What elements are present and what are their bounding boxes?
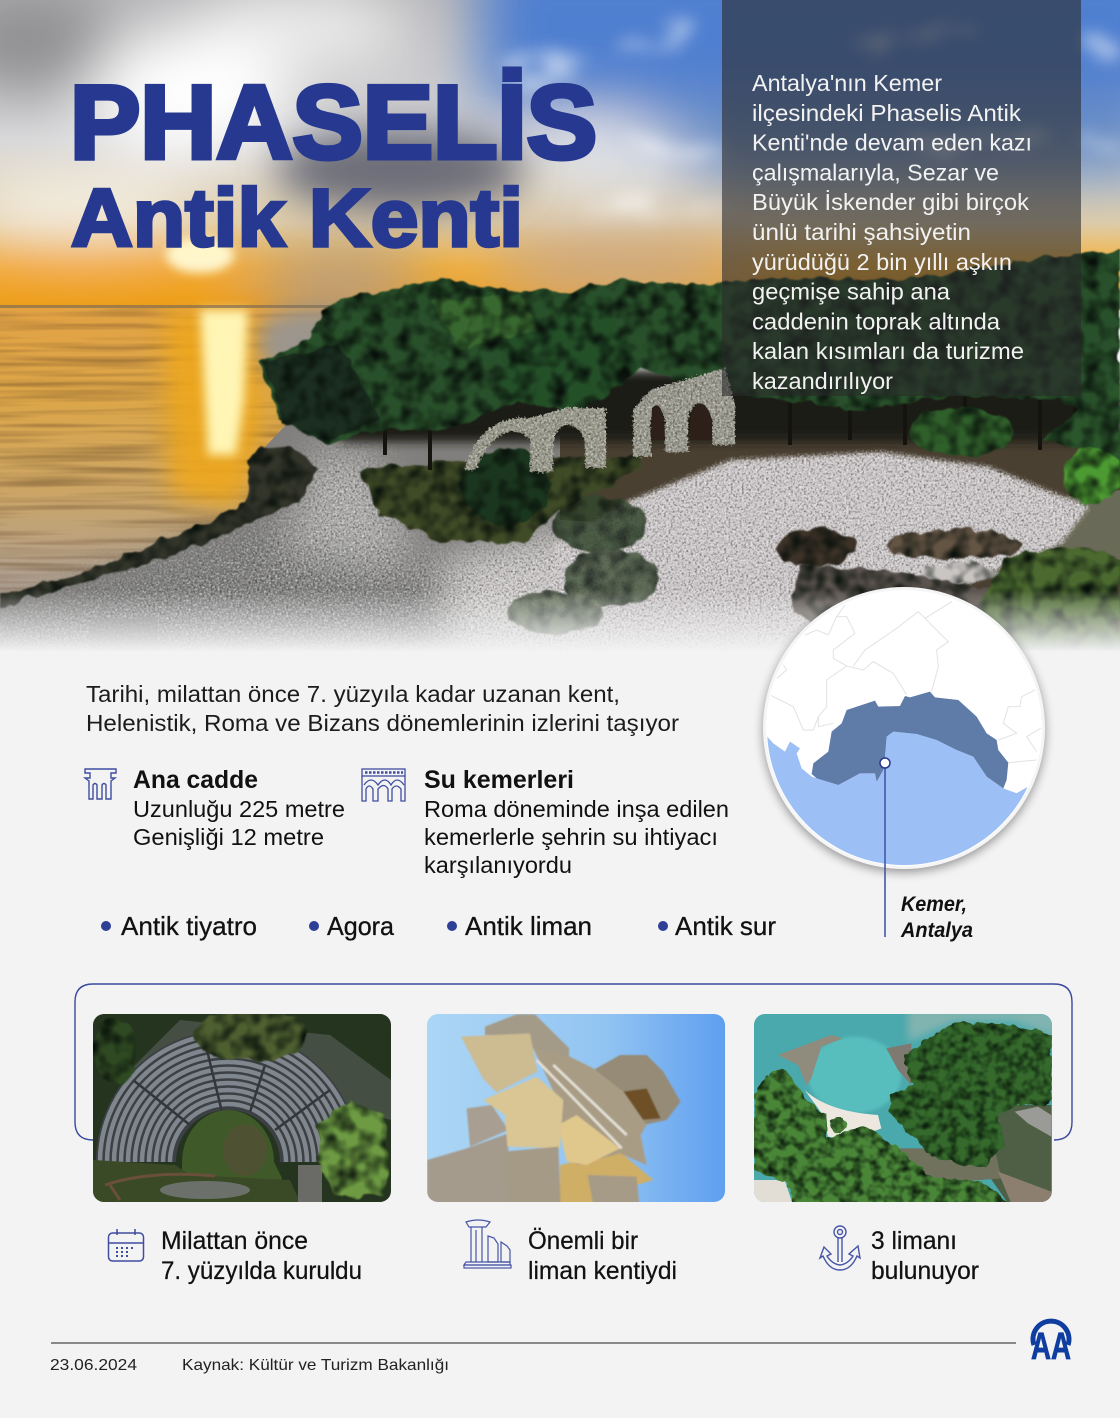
text: Ana cadde: Ana cadde xyxy=(133,766,258,794)
rocks around seating xyxy=(130,1020,391,1120)
shaded forest floor xyxy=(340,370,1120,442)
bottom left sand xyxy=(754,1180,793,1205)
intro paragraph: kalan kısımları da turizme xyxy=(752,338,1024,364)
intro paragraph: Antalya'nın Kemer xyxy=(752,70,942,96)
bullet list of sites: Agora xyxy=(327,911,395,941)
subtitle text: Tarihi, milattan önce 7. yüzyıla kadar uzanan kent, xyxy=(86,681,620,707)
cornice stripes xyxy=(537,1060,627,1148)
text: Su kemerleri: Su kemerleri xyxy=(424,766,574,794)
location label: Antalya xyxy=(900,919,973,942)
sky xyxy=(0,0,1120,310)
intro paragraph: yürüdüğü 2 bin yıllı aşkın xyxy=(752,249,1012,275)
sun xyxy=(166,237,234,273)
text: Su kemerleri: kemerlerle şehrin su ihtiyacı xyxy=(424,824,718,850)
district borders xyxy=(770,602,1043,763)
hero photo: sunset over Phaselis xyxy=(0,0,1120,700)
text: Su kemerleri xyxy=(424,766,729,878)
photo: ancient theatre xyxy=(93,1009,391,1202)
ruins on the right xyxy=(981,1105,1051,1203)
tree trunks xyxy=(385,390,1075,470)
text: Su kemerleri: karşılanıyordu xyxy=(424,852,572,878)
diagonal entablature xyxy=(533,1048,647,1165)
subtitle text: Helenistik, Roma ve Bizans dönemlerinin izlerini taşıyor xyxy=(86,710,679,736)
undergrowth xyxy=(360,455,640,545)
lower left wall xyxy=(427,1133,508,1205)
lower warm soffit xyxy=(560,1152,653,1205)
aqueduct ruins xyxy=(464,368,735,472)
top block xyxy=(485,1014,569,1065)
title: PHASELİS xyxy=(70,65,597,181)
bushes xyxy=(462,408,1120,524)
pin xyxy=(880,758,890,768)
rear wall block xyxy=(467,1105,508,1147)
intro paragraph: Kenti'nde devam eden kazı xyxy=(752,130,1032,156)
Antalya province xyxy=(812,692,1008,788)
icon: aqueduct xyxy=(362,769,405,801)
location label: Kemer, xyxy=(901,893,967,916)
bullet list of sites xyxy=(101,911,776,941)
text: harbour city xyxy=(528,1227,677,1285)
icon: column capital xyxy=(85,769,116,799)
lone pine in foreground xyxy=(507,497,660,634)
dark patches on the clearing xyxy=(775,525,1120,640)
intro paragraph: Büyük İskender gibi birçok xyxy=(752,189,1029,215)
pebble beach xyxy=(0,437,566,647)
subtitle text xyxy=(86,681,679,736)
sandy beach xyxy=(805,1090,881,1140)
white clearing xyxy=(554,448,1091,646)
rocky headland xyxy=(778,1035,843,1085)
icon: anchor xyxy=(820,1226,860,1270)
bullet list of sites: Antik tiyatro xyxy=(121,911,257,941)
text: Ana cadde: Uzunluğu 225 metre xyxy=(133,796,345,822)
bullet list of sites: Antik liman xyxy=(465,911,592,941)
trees xyxy=(93,1009,391,1198)
text: founding: 7. yüzyılda kuruldu xyxy=(161,1257,362,1285)
text: Su kemerleri: Roma döneminde inşa edilen xyxy=(424,796,729,822)
cirrus streaks xyxy=(510,30,1120,215)
intro paragraph: kazandırılıyor xyxy=(752,368,893,394)
text: harbours: bulunuyor xyxy=(871,1257,979,1285)
intro paragraph: geçmişe sahip ana xyxy=(752,279,951,305)
text: harbour city: liman kentiydi xyxy=(528,1257,677,1285)
dark rocky shoreline xyxy=(0,446,318,606)
text: founding xyxy=(161,1227,362,1285)
title xyxy=(70,65,597,264)
text: harbour city: Önemli bir xyxy=(528,1227,638,1255)
text: harbours xyxy=(871,1227,979,1285)
intro paragraph: ilçesindeki Phaselis Antik xyxy=(752,100,1021,126)
footer date: 23.06.2024 xyxy=(50,1357,137,1374)
orchestra floor xyxy=(182,1110,282,1180)
text: Ana cadde: Genişliği 12 metre xyxy=(133,824,324,850)
second column xyxy=(588,1175,639,1205)
icon: ruined columns xyxy=(464,1220,511,1268)
text: founding: Milattan önce xyxy=(161,1227,308,1255)
intro paragraph: caddenin toprak altında xyxy=(752,308,1001,334)
icon: calendar xyxy=(108,1229,144,1261)
AA logo xyxy=(1031,1321,1071,1368)
locator map xyxy=(756,586,1052,937)
stairs xyxy=(298,1165,322,1202)
sea xyxy=(767,732,1028,865)
distant shallows xyxy=(908,1008,1058,1042)
title: Antik Kenti xyxy=(71,173,523,264)
forests xyxy=(754,1022,1051,1205)
intro paragraph xyxy=(752,70,1032,394)
stone seating rows xyxy=(96,1030,360,1162)
top left cornice xyxy=(461,1033,537,1092)
grey cloud bank xyxy=(275,128,525,212)
footer source: Kaynak: Kültür ve Turizm Bakanlığı xyxy=(182,1357,449,1374)
shed at shore xyxy=(90,618,158,636)
photo: aerial view of harbour xyxy=(754,1008,1058,1205)
pine forest xyxy=(258,250,1120,470)
radial aisles xyxy=(133,1042,330,1130)
earth behind the clearing xyxy=(560,435,1120,634)
foreground ground xyxy=(93,1160,300,1202)
AA logo: AA xyxy=(1031,1326,1071,1368)
intro paragraph: ünlü tarihi şahsiyetin xyxy=(752,219,971,245)
location label xyxy=(900,893,973,942)
footer rule xyxy=(51,1342,1016,1344)
bottom fade to paper xyxy=(0,590,1120,661)
land base xyxy=(0,400,1120,660)
text: harbours: 3 limanı xyxy=(871,1227,957,1255)
main column shaft xyxy=(503,1147,561,1205)
dark intro panel xyxy=(722,0,1081,396)
pin line xyxy=(884,763,886,937)
text: Ana cadde xyxy=(133,766,345,850)
sea xyxy=(0,295,342,600)
lagoon xyxy=(808,1037,901,1113)
photo: temple ruin against blue sky xyxy=(427,1014,725,1205)
main column capital xyxy=(483,1077,563,1148)
right corner cornice xyxy=(593,1055,681,1125)
intro paragraph: çalışmalarıyla, Sezar ve xyxy=(752,159,999,185)
bracket around photos xyxy=(75,984,1072,1140)
bullet list of sites: Antik sur xyxy=(675,911,776,941)
